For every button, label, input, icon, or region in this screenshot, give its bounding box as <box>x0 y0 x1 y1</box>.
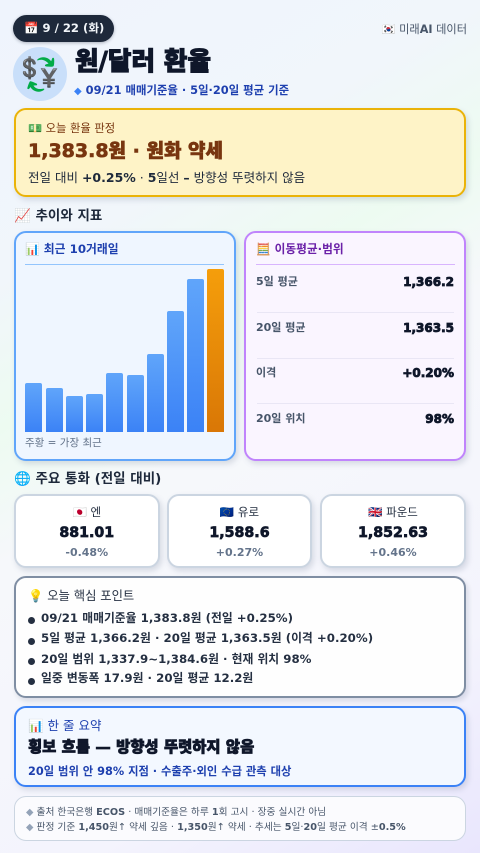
panel: footer notes <box>14 796 466 841</box>
panel: yen: 881.01 <box>59 525 114 541</box>
key points heading: 💡 오늘 핵심 포인트 <box>28 589 134 603</box>
value: gap: +0.20% <box>402 366 454 380</box>
heading: trends: 📈 추이와 지표 <box>14 208 102 224</box>
criteria note: ◆ 판정 기준 1,450원↑ 약세 깊음 · 1,350원↑ 약세 · 추세는 5일·20일 평균 이격 ±0.5% <box>26 822 406 832</box>
panel: pound <box>320 494 466 568</box>
panel: yen: 🇯🇵 엔 <box>72 505 101 519</box>
panel: bar chart <box>14 231 236 461</box>
icon: currency exchange: 💱 <box>20 55 60 93</box>
verdict detail: 전일 대비 +0.25% · 5일선 – 방향성 뚜렷하지 않음 <box>28 170 305 185</box>
row: gap: 이격 <box>256 366 276 379</box>
chart note: 주황 = 가장 최근 <box>25 437 102 449</box>
value: 20-day average: 1,363.5 <box>403 321 454 335</box>
date badge <box>13 15 114 42</box>
panel: euro: 1,588.6 <box>209 525 270 541</box>
subtitle: ◆ 09/21 매매기준율 · 5일·20일 평균 기준 <box>74 83 289 97</box>
summary label: 📊 한 줄 요약 <box>28 718 101 733</box>
verdict headline: 1,383.8원 · 원화 약세 <box>28 140 223 162</box>
value: 5-day average: 1,366.2 <box>403 275 454 289</box>
summary detail: 20일 범위 안 98% 지점 · 수출주·외인 수급 관측 대상 <box>28 765 291 778</box>
title: 원/달러 환율 <box>75 47 211 77</box>
icon: currency exchange <box>13 47 67 101</box>
point 2: 5일 평균 1,366.2원 · 20일 평균 1,363.5원 (이격 +0.20%) <box>41 631 373 645</box>
row: 20-day average: 20일 평균 <box>256 321 306 334</box>
date badge: 📅 9 / 22 (화) <box>24 21 104 35</box>
panel: moving averages <box>244 231 466 461</box>
panel: euro: +0.27% <box>216 546 263 559</box>
row: 5-day average: 5일 평균 <box>256 275 298 288</box>
panel: euro: 🇪🇺 유로 <box>220 505 259 519</box>
verdict label: 💵 오늘 환율 판정 <box>28 122 115 135</box>
panel: key points <box>14 576 466 698</box>
row: 20-day position: 20일 위치 <box>256 412 306 425</box>
panel: yen: -0.48% <box>65 546 108 559</box>
panel: euro <box>167 494 312 568</box>
panel: yen <box>14 494 160 568</box>
panel: pound: +0.46% <box>369 546 417 559</box>
point 3: 20일 범위 1,337.9~1,384.6원 · 현재 위치 98% <box>41 652 312 666</box>
source note: ◆ 출처 한국은행 ECOS · 매매기준율은 하루 1회 고시 · 장중 실시간 아님 <box>26 806 326 818</box>
panel heading: 🧮 이동평균·범위 <box>256 242 344 256</box>
panel: verdict <box>14 108 466 197</box>
point 4: 일중 변동폭 17.9원 · 20일 평균 12.2원 <box>41 671 253 685</box>
bar chart <box>25 269 224 432</box>
summary headline: 횡보 흐름 — 방향성 뚜렷하지 않음 <box>28 738 254 756</box>
value: 20-day position: 98% <box>425 412 454 426</box>
brand label: 🇰🇷 미래AI 데이터 <box>382 23 467 36</box>
panel: pound: 🇬🇧 파운드 <box>368 505 418 519</box>
point 1: 09/21 매매기준율 1,383.8원 (전일 +0.25%) <box>41 611 293 625</box>
heading: currencies: 🌐 주요 통화 (전일 대비) <box>14 471 161 487</box>
panel: one-line summary <box>14 706 466 787</box>
panel: pound: 1,852.63 <box>358 525 428 541</box>
chart heading: 📊 최근 10거래일 <box>25 242 119 256</box>
